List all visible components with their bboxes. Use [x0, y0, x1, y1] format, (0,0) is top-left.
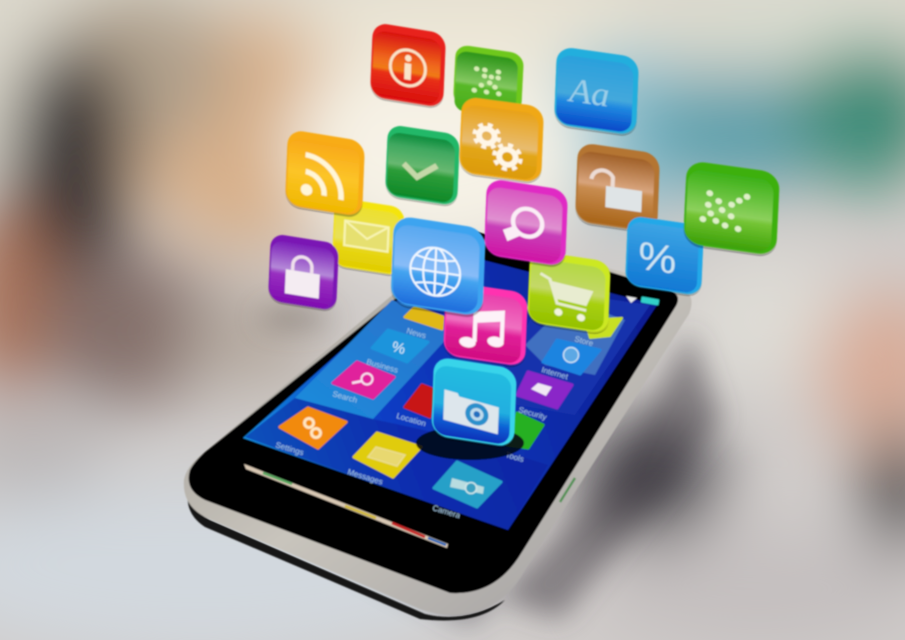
screen labels: Settings	[274, 440, 305, 457]
phone silver body	[184, 230, 692, 615]
smartphone	[184, 230, 692, 620]
screen lighter panel	[295, 300, 462, 419]
icon: yellow RSS feed	[285, 129, 365, 219]
phone black bezel	[189, 232, 678, 593]
screen map panel	[490, 290, 650, 415]
camera icon shadow on screen	[416, 426, 524, 460]
screen labels: News	[405, 326, 427, 340]
icon: green dotted mark	[683, 160, 780, 258]
tile: settings	[280, 408, 346, 448]
tile: news	[405, 307, 443, 329]
icon: typography Aa	[554, 46, 639, 138]
icon: pink music note	[443, 281, 528, 369]
tile: red location	[405, 385, 435, 417]
phone cast shadow	[300, 330, 720, 625]
icon: yellow mail	[332, 197, 405, 278]
icon: cyan camera	[431, 356, 517, 450]
screen labels: Internet	[540, 365, 570, 382]
home indicator bar	[244, 464, 448, 548]
icon: purple padlock	[268, 233, 339, 313]
icon: info (red)	[370, 22, 446, 110]
tile: camera	[434, 462, 501, 507]
tile: business	[372, 330, 428, 362]
screen labels: Business	[365, 357, 399, 375]
icon: magenta search	[484, 178, 568, 269]
icon: brown open lock	[575, 142, 660, 235]
icon: lime shopping cart	[527, 250, 611, 336]
screen labels: Security	[517, 405, 548, 422]
purple lock shadow	[259, 309, 331, 327]
tile: yellow store	[585, 318, 622, 338]
icon: typography Aa: Aa	[567, 70, 610, 114]
icon: blue percent: %	[638, 233, 677, 283]
icon: green check	[385, 124, 460, 208]
tile: business: %	[390, 338, 407, 358]
status icons	[626, 296, 659, 306]
phone underside edge	[188, 492, 505, 620]
tile: green tools	[507, 413, 543, 448]
screen labels: Messages	[346, 467, 384, 487]
icon: green dotted cross	[453, 44, 524, 120]
icon: blue percent	[625, 215, 704, 298]
screen labels	[274, 326, 595, 520]
icon: orange gears	[459, 96, 544, 185]
tile: search	[333, 362, 394, 398]
tile: security	[517, 372, 572, 408]
screen labels: Tools	[504, 450, 525, 464]
tile: internet	[543, 340, 600, 374]
screen labels: Camera	[431, 503, 462, 520]
icon: blue globe	[390, 215, 486, 320]
screen lower dark band	[245, 398, 548, 530]
tile: messages	[354, 433, 421, 477]
screen labels: Store	[573, 334, 595, 348]
screen labels: Search	[331, 389, 358, 405]
phone screen	[243, 252, 657, 530]
screen world map tint	[525, 300, 625, 375]
screen labels: Location	[395, 411, 427, 428]
phone coloured side reflections	[506, 478, 575, 568]
